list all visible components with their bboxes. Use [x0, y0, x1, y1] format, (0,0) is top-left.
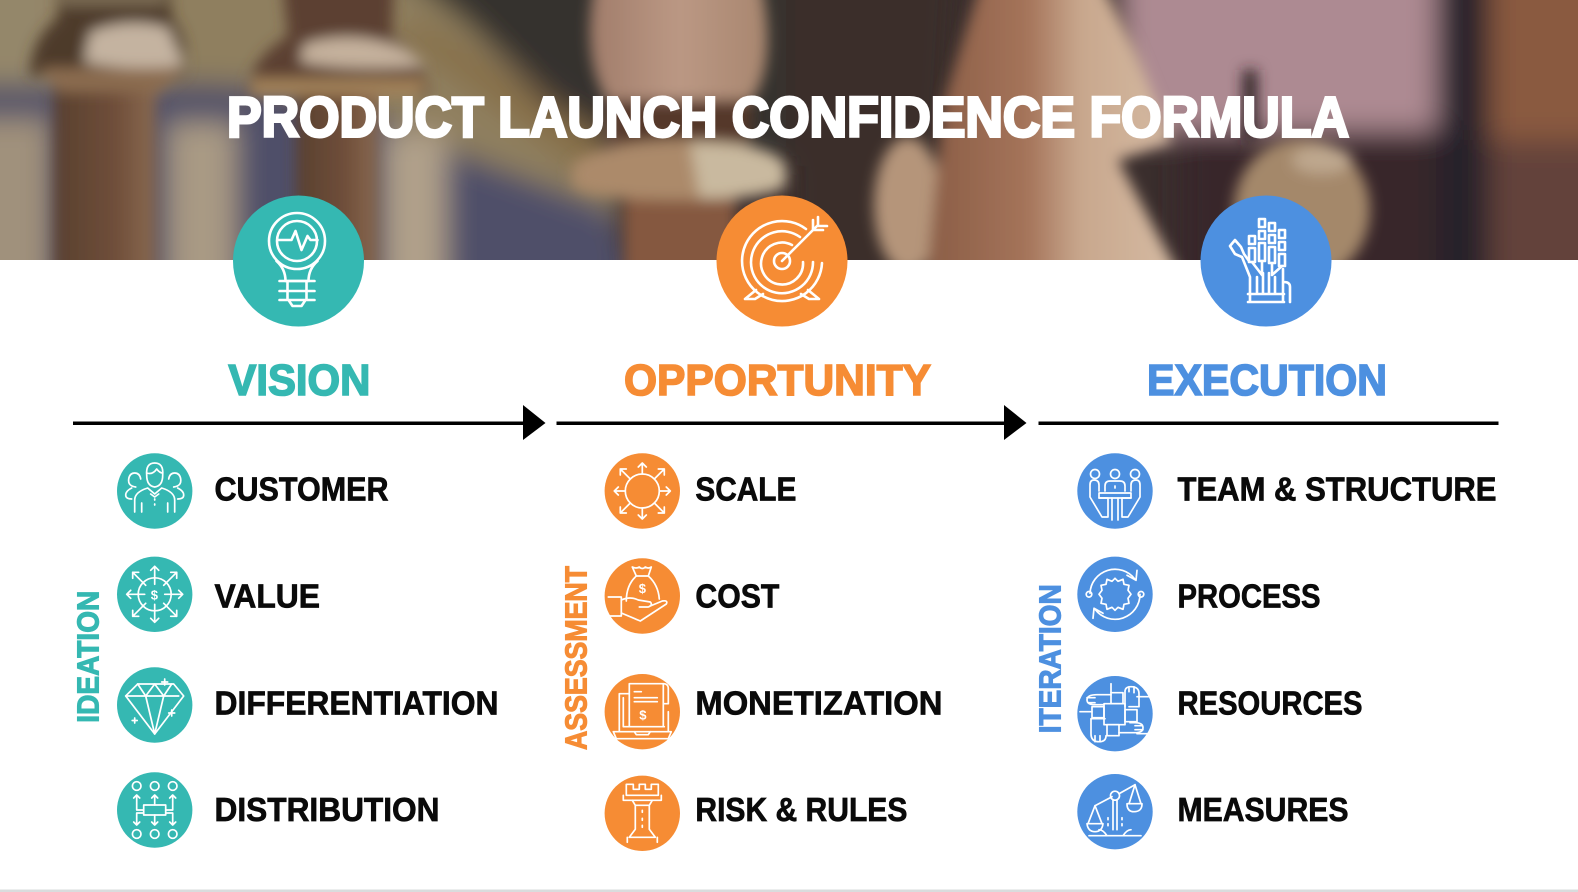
icon: laptop with report: $	[639, 708, 647, 723]
right ball	[1234, 138, 1370, 282]
icon: linked hands	[1077, 676, 1153, 751]
foreground pawn	[624, 190, 736, 280]
side label: iteration: ITERATION	[1034, 584, 1068, 733]
icon: value burst: $	[151, 587, 159, 602]
label: risk and rules: RISK & RULES	[695, 792, 907, 829]
title: PRODUCT LAUNCH CONFIDENCE FORMULA	[227, 87, 1349, 150]
icon: money bag in hand	[605, 558, 680, 634]
row: cost	[605, 558, 780, 634]
label: differentiation: DIFFERENTIATION	[214, 686, 498, 723]
row: measures	[1077, 774, 1348, 849]
icon: target	[716, 196, 848, 326]
row: value	[117, 557, 320, 632]
row: customer	[117, 453, 388, 529]
arrow: vision to opportunity	[73, 405, 546, 440]
row: team and structure	[1077, 453, 1496, 529]
header photo: blurred chess pieces	[0, 0, 1578, 260]
label: customer: CUSTOMER	[214, 472, 388, 509]
heading: execution: EXECUTION	[1147, 357, 1387, 405]
icon: rook tower	[605, 776, 680, 851]
icon: gear cycle	[1077, 557, 1153, 632]
label: scale: SCALE	[695, 472, 796, 509]
icon: value burst	[117, 557, 192, 632]
arrow: opportunity to execution	[556, 405, 1026, 440]
icon: lightbulb	[233, 196, 364, 326]
row: resources	[1077, 676, 1362, 751]
icon: robotic hand	[1200, 196, 1332, 326]
row: differentiation	[117, 667, 498, 743]
pawn 2	[296, 90, 378, 280]
icon: customer group	[117, 453, 192, 529]
pawn 1	[54, 70, 156, 280]
icon: team at table	[1077, 453, 1153, 529]
heading: vision: VISION	[228, 357, 370, 405]
icon: money bag in hand: $	[639, 581, 647, 596]
label: team and structure: TEAM & STRUCTURE	[1178, 472, 1496, 509]
side label: ideation: IDEATION	[72, 591, 106, 723]
label: process: PROCESS	[1178, 579, 1320, 616]
label: resources: RESOURCES	[1178, 686, 1362, 723]
row: process	[1077, 557, 1320, 632]
label: value: VALUE	[214, 579, 320, 616]
icon: scale burst	[605, 453, 680, 529]
icon: diamond	[117, 667, 192, 743]
row: risk and rules	[605, 776, 907, 851]
column: vision	[72, 196, 545, 848]
icon: distribution flow	[117, 772, 192, 848]
label: monetization: MONETIZATION	[695, 686, 942, 723]
row: distribution	[117, 772, 440, 848]
heading: opportunity: OPPORTUNITY	[624, 357, 931, 405]
column: execution	[1034, 196, 1498, 849]
timeline line: execution	[1038, 422, 1498, 425]
icon: laptop with report	[605, 674, 680, 749]
column: opportunity	[556, 196, 1026, 851]
icon: balance scale	[1077, 774, 1153, 849]
knight	[926, 0, 1182, 280]
row: scale	[605, 453, 796, 529]
left ball behind knight	[874, 137, 942, 273]
row: monetization	[605, 674, 942, 749]
label: cost: COST	[695, 579, 780, 616]
label: measures: MEASURES	[1178, 792, 1348, 829]
label: distribution: DISTRIBUTION	[214, 792, 440, 829]
side label: assessment: ASSESSMENT	[560, 566, 594, 750]
